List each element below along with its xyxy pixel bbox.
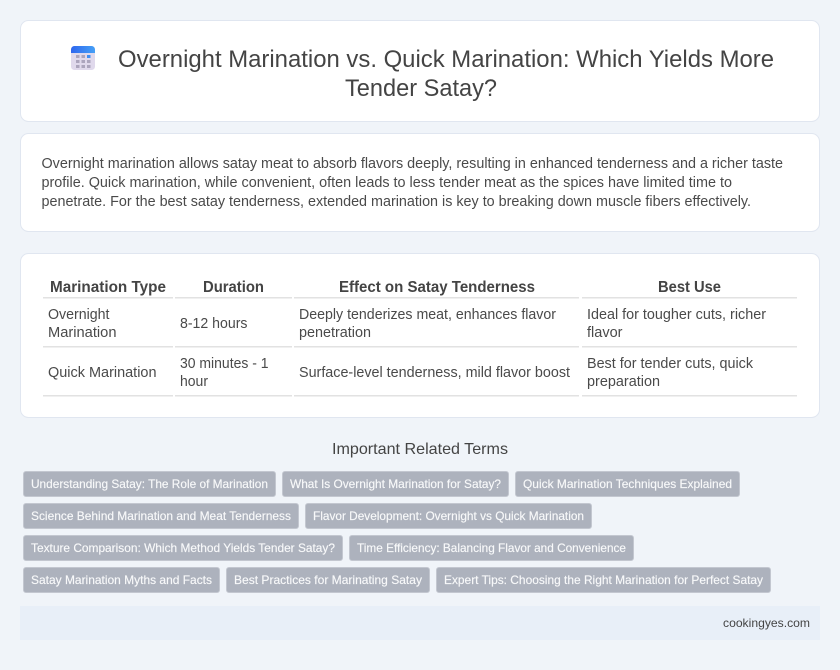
table header row [50, 279, 721, 296]
tag group: related terms: Best Practices for Marinating Satay [234, 573, 422, 587]
tag group: related terms: Satay Marination Myths and Facts [31, 573, 212, 587]
tag group: related terms: Flavor Development: Overnight vs Quick Marination [313, 509, 584, 523]
icon: calendar [71, 46, 95, 70]
tag group: related terms: Understanding Satay: The Role of Marination [31, 477, 268, 491]
title [118, 46, 774, 102]
table row: quick marination: Surface-level tenderness, mild flavor boost [299, 365, 570, 381]
table row: quick marination: Best for tender cuts, quick [587, 356, 754, 372]
footer: cookingyes.com [723, 616, 810, 630]
heading: important related terms: Important Related Terms [332, 441, 508, 458]
table row: quick marination [48, 356, 754, 390]
table row: overnight marination: Overnight [48, 307, 110, 323]
title: Tender Satay? [345, 75, 497, 102]
table header row: Best Use [658, 279, 721, 296]
panel: comparison table [20, 254, 820, 418]
tag group: related terms: What Is Overnight Marination for Satay? [290, 477, 501, 491]
table header row: Duration [203, 279, 264, 296]
table row: quick marination: Quick Marination [48, 365, 156, 381]
table row: overnight marination: Ideal for tougher cuts, richer [587, 307, 766, 323]
text block: summary: profile. Quick marination, while convenient, often leads to less tender meat as the spices have limited time to [42, 175, 732, 191]
tag group: related terms: Science Behind Marination and Meat Tenderness [31, 509, 291, 523]
panel: summary paragraph [20, 134, 820, 232]
text block: summary: penetrate. For the best satay tenderness, extended marination is key to breaking down muscle fibers effectively. [42, 194, 751, 210]
table row: quick marination: preparation [587, 374, 660, 390]
table row: quick marination: 30 minutes - 1 [180, 356, 268, 372]
table row: quick marination: hour [180, 374, 208, 390]
tag group: related terms: Expert Tips: Choosing the Right Marination for Perfect Satay [444, 573, 763, 587]
table row: overnight marination: Marination [48, 325, 116, 341]
table row: overnight marination: Deeply tenderizes meat, enhances flavor [299, 307, 556, 323]
title: Overnight Marination vs. Quick Marination: Which Yields More [118, 46, 774, 73]
tag group: related terms [24, 472, 770, 592]
tag group: related terms: Time Efficiency: Balancing Flavor and Convenience [357, 541, 626, 555]
tag group: related terms: Quick Marination Techniques Explained [523, 477, 732, 491]
table header row: Marination Type [50, 279, 166, 296]
table row: overnight marination: 8-12 hours [180, 316, 248, 332]
footer [20, 606, 820, 640]
table row: overnight marination: penetration [299, 325, 371, 341]
text block: summary: Overnight marination allows satay meat to absorb flavors deeply, resulting in enhanced tenderness and a richer taste [42, 156, 783, 172]
panel: header [20, 20, 820, 122]
table header row: Effect on Satay Tenderness [339, 279, 535, 296]
text block: summary [42, 156, 783, 210]
table row: overnight marination [48, 307, 766, 341]
table row: overnight marination: flavor [587, 325, 623, 341]
tag group: related terms: Texture Comparison: Which Method Yields Tender Satay? [31, 541, 335, 555]
